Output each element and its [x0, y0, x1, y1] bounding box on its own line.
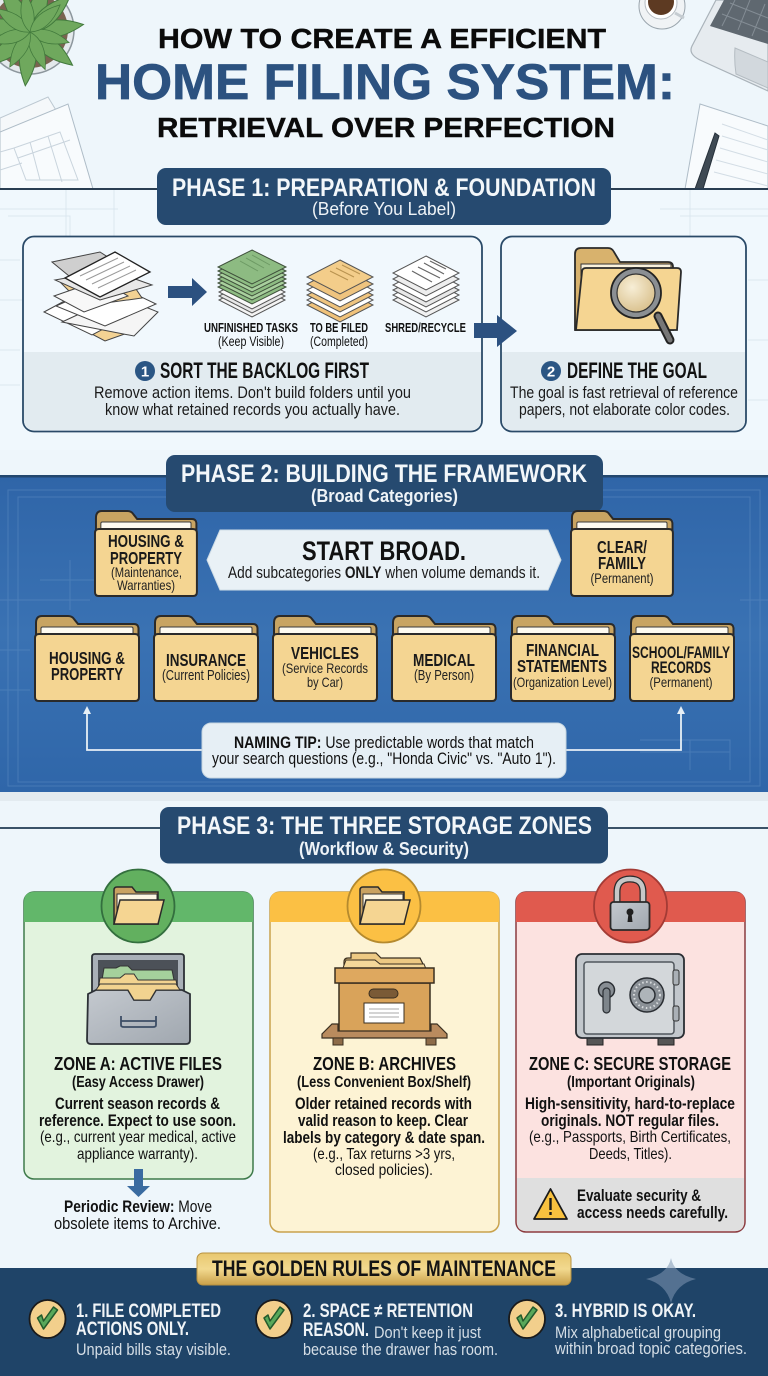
folder: clear family: FAMILY: [598, 553, 646, 573]
text: periodic review: obsolete items to Archive.: [54, 1215, 221, 1233]
zone B text: Older retained records with: [295, 1095, 472, 1113]
icon: yellow folder badge: [348, 870, 420, 942]
callout: naming tip: NAMING TIP: Use predictable words that match: [234, 733, 534, 752]
zone A text: appliance warranty).: [77, 1146, 198, 1163]
folder: clear family: (Permanent): [590, 570, 654, 586]
zone A text: Current season records &: [55, 1095, 220, 1113]
folder: financial statements: (Organization Level): [513, 674, 612, 690]
arrow: mess to piles: [168, 278, 207, 306]
step 2 heading: 2: [547, 364, 555, 380]
folder: medical: (By Person): [414, 668, 474, 684]
decoration: coffee cup: [639, 0, 685, 29]
icon: padlock badge: [594, 870, 667, 942]
phase 3 header: (Workflow & Security): [299, 839, 469, 859]
folder: school family records: RECORDS: [651, 659, 711, 677]
arrow: periodic review: [127, 1169, 150, 1197]
zone A text: ZONE A: ACTIVE FILES: [54, 1053, 222, 1074]
phase 3 divider: [0, 827, 768, 829]
zone C text: [525, 1053, 735, 1163]
decoration: plant: [0, 0, 85, 87]
folder: school family records: SCHOOL/FAMILY: [632, 644, 730, 662]
title: HOME FILING SYSTEM:: [95, 54, 675, 110]
folder: vehicles: by Car): [307, 674, 343, 690]
step 1 body: know what retained records you actually have.: [105, 400, 400, 419]
step 2 heading: [541, 358, 707, 383]
rule 2: because the drawer has room.: [303, 1341, 498, 1359]
rule 2: [256, 1300, 498, 1359]
phase 1 divider: [0, 188, 768, 190]
folder: housing and property maintenance: PROPERTY: [110, 548, 182, 568]
panel: define the goal: [501, 236, 746, 432]
phase 1 header: [157, 168, 611, 225]
icon: folder with magnifier: [575, 248, 681, 340]
decoration: laptop: [691, 0, 768, 91]
folder: medical: [392, 616, 496, 701]
warning text: [577, 1187, 728, 1222]
rule 2: 2. SPACE ≠ RETENTION: [303, 1301, 473, 1322]
banner: start broad: START BROAD.: [302, 536, 466, 566]
panel: sort the backlog: [23, 236, 482, 432]
panel: golden rules band: [0, 1268, 768, 1376]
folder: financial statements: [511, 616, 615, 701]
zone C text: (e.g., Passports, Birth Certificates,: [529, 1129, 731, 1146]
rule 2: REASON.: [303, 1320, 369, 1341]
banner: start broad: Add subcategories ONLY when volume demands it.: [228, 563, 540, 582]
arrow: step 1 to step 2: [474, 315, 517, 347]
decoration: sparkle: [646, 1258, 696, 1303]
icon: green folder badge: [102, 870, 174, 942]
folder: school family records: (Permanent): [650, 674, 712, 690]
icon: messy paper pile: [44, 252, 158, 341]
arrow: naming tip to left folder: [83, 706, 202, 750]
folder: vehicles: VEHICLES: [291, 643, 359, 663]
zone B text: (Less Convenient Box/Shelf): [297, 1074, 471, 1091]
rule 1: [30, 1300, 231, 1359]
zone B text: valid reason to keep. Clear: [298, 1112, 468, 1130]
heading: golden rules: [197, 1253, 571, 1285]
step 2 body: [510, 383, 738, 419]
folder: vehicles: (Service Records: [282, 660, 368, 676]
folder: insurance: [154, 616, 258, 701]
icon: warning triangle: [534, 1189, 567, 1219]
rule 1: 1. FILE COMPLETED: [76, 1301, 221, 1322]
folder: financial statements: STATEMENTS: [517, 656, 607, 676]
title: HOW TO CREATE A EFFICIENT: [158, 23, 606, 54]
title: RETRIEVAL OVER PERFECTION: [157, 112, 615, 143]
banner: start broad: [207, 530, 561, 590]
icon: yellow stack: [307, 260, 373, 322]
rule 1: ACTIONS ONLY.: [76, 1319, 189, 1340]
stack labels: SHRED/RECYCLE: [385, 321, 466, 335]
rule 3: [509, 1300, 747, 1358]
step 2 heading: DEFINE THE GOAL: [567, 358, 707, 383]
phase 2 header: [166, 455, 603, 512]
step 1 heading: 1: [141, 364, 149, 380]
rule 3: Mix alphabetical grouping: [555, 1324, 721, 1342]
decoration: left document: [0, 97, 93, 189]
warning text: Evaluate security &: [577, 1187, 701, 1205]
folder: housing and property: [35, 616, 139, 701]
folder: insurance: (Current Policies): [162, 668, 250, 684]
phase 1 header: PHASE 1: PREPARATION & FOUNDATION: [172, 174, 596, 202]
phase 3 header: [160, 807, 608, 864]
rule 1: Unpaid bills stay visible.: [76, 1341, 231, 1359]
icon: shred stack: [393, 256, 459, 317]
text: periodic review: Periodic Review: Move: [64, 1198, 212, 1216]
zone B text: closed policies).: [335, 1162, 433, 1179]
zone A text: [39, 1053, 236, 1163]
icon: archive box: [322, 953, 447, 1045]
folder: financial statements: FINANCIAL: [526, 640, 599, 660]
folder: housing and property maintenance: (Maintenance,: [111, 564, 182, 580]
folder: housing and property: HOUSING &: [49, 648, 125, 668]
zone B text: ZONE B: ARCHIVES: [313, 1053, 456, 1074]
zone A text: reference. Expect to use soon.: [39, 1112, 236, 1130]
phase 3 header: PHASE 3: THE THREE STORAGE ZONES: [177, 812, 592, 840]
zone A text: (Easy Access Drawer): [72, 1074, 204, 1091]
panel: zone A: [24, 870, 253, 1179]
stack labels: TO BE FILED: [310, 321, 368, 335]
warning text: access needs carefully.: [577, 1204, 728, 1222]
step 1 body: Remove action items. Don't build folders until you: [94, 383, 411, 402]
folder: housing and property: PROPERTY: [51, 664, 123, 684]
folder: housing and property maintenance: [95, 511, 197, 596]
zone B text: labels by category & date span.: [283, 1129, 485, 1147]
zone C text: originals. NOT regular files.: [541, 1112, 719, 1130]
phase 1 header: (Before You Label): [312, 199, 456, 219]
callout: naming tip: your search questions (e.g., "Honda Civic" vs. "Auto 1").: [212, 749, 556, 768]
phase 2 header: PHASE 2: BUILDING THE FRAMEWORK: [181, 460, 587, 488]
folder: vehicles: [273, 616, 377, 701]
stack labels: [204, 321, 466, 349]
step 1 heading: SORT THE BACKLOG FIRST: [160, 358, 369, 383]
arrow: naming tip to right folder: [566, 706, 685, 750]
folder: clear family: CLEAR/: [597, 537, 647, 557]
blueprint pattern behind phase 1: [0, 190, 768, 450]
folder: medical: MEDICAL: [413, 650, 475, 670]
panel: zone B: [270, 870, 499, 1232]
stack labels: UNFINISHED TASKS: [204, 321, 298, 335]
decoration: right document with pen: [685, 104, 768, 189]
folder: school family records: [630, 616, 734, 701]
title: [95, 23, 675, 143]
phase 2 header: (Broad Categories): [311, 486, 458, 506]
zone C text: Deeds, Titles).: [589, 1146, 672, 1163]
panel: zone C: [516, 870, 745, 1232]
folder: clear family: [571, 511, 673, 596]
rule 3: 3. HYBRID IS OKAY.: [555, 1301, 696, 1322]
stack labels: (Keep Visible): [218, 334, 284, 349]
callout: naming tip: [202, 723, 566, 778]
rule 3: within broad topic categories.: [554, 1340, 747, 1358]
stack labels: (Completed): [310, 334, 368, 349]
zone B text: [283, 1053, 485, 1179]
folder: insurance: INSURANCE: [166, 650, 246, 670]
step 1 body: [94, 383, 411, 419]
zone C text: (Important Originals): [567, 1074, 695, 1091]
text: periodic review: [54, 1198, 221, 1233]
folder: housing and property maintenance: HOUSING &: [108, 531, 184, 551]
folder: housing and property maintenance: Warranties): [117, 577, 175, 593]
icon: green stack: [218, 250, 286, 317]
icon: file drawer: [87, 954, 190, 1044]
phase 2 background: [0, 475, 768, 801]
rule 2: Don't keep it just: [374, 1324, 481, 1342]
zone A text: (e.g., current year medical, active: [40, 1129, 236, 1146]
heading: golden rules: THE GOLDEN RULES OF MAINTENANCE: [212, 1256, 556, 1281]
icon: safe: [576, 954, 684, 1045]
zone B text: (e.g., Tax returns >3 yrs,: [313, 1146, 455, 1163]
step 1 heading: [135, 358, 369, 383]
